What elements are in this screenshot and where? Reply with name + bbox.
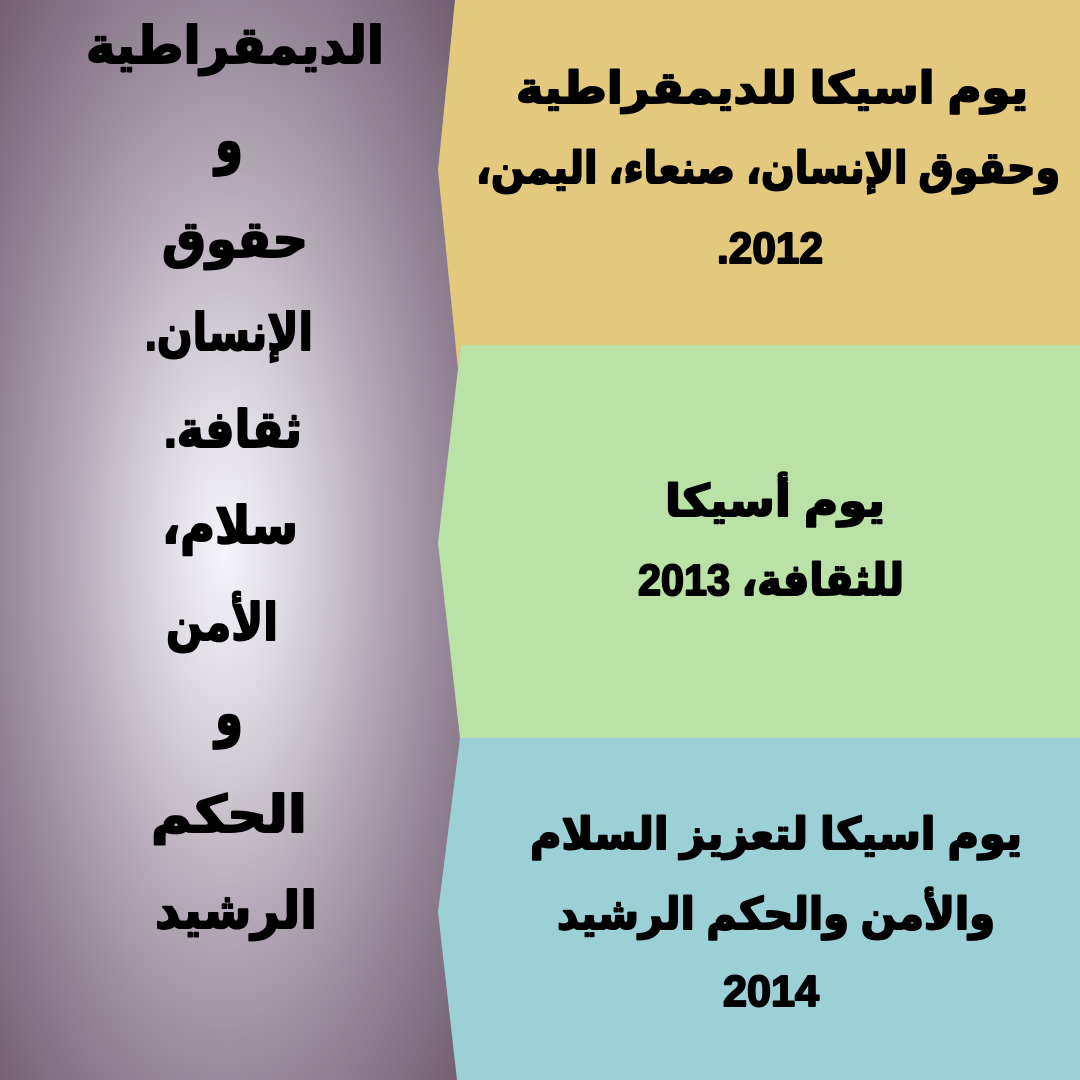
text: gold panel caption: يوم اسيكا للديمقراطية	[516, 64, 1028, 114]
left column text: themes: حقوق	[162, 211, 308, 270]
left column text: themes: الديمقراطية	[86, 17, 384, 76]
text: blue panel caption: 2014	[723, 967, 820, 1016]
text: blue panel caption: يوم اسيكا لتعزيز السلام	[530, 810, 1022, 860]
left column text: themes: الإنسان.	[145, 304, 313, 362]
left column text: themes: سلام،	[162, 497, 298, 555]
text: gold panel caption: .2012	[717, 224, 823, 273]
panel: left gradient background	[0, 0, 480, 1080]
left column text: themes: ثقافة.	[164, 401, 302, 458]
text: gold panel caption	[476, 64, 1060, 273]
left column text: themes: الأمن	[166, 591, 278, 653]
left column text: themes: و	[213, 680, 243, 749]
left column text: themes	[86, 17, 384, 941]
panel: green 2013	[438, 345, 1080, 738]
left column text: themes: الحكم	[151, 786, 307, 845]
left column text: themes: الرشيد	[155, 882, 317, 941]
text: green panel caption: للثقافة، 2013	[638, 556, 904, 605]
panel: gold 2012	[438, 0, 1080, 369]
left column text: themes: و	[213, 107, 243, 176]
text: green panel caption	[638, 472, 904, 605]
panel: blue 2014	[438, 738, 1080, 1080]
text: blue panel caption	[530, 810, 1022, 1016]
text: blue panel caption: والأمن والحكم الرشيد	[557, 887, 995, 940]
text: green panel caption: يوم أسيكا	[665, 472, 885, 527]
